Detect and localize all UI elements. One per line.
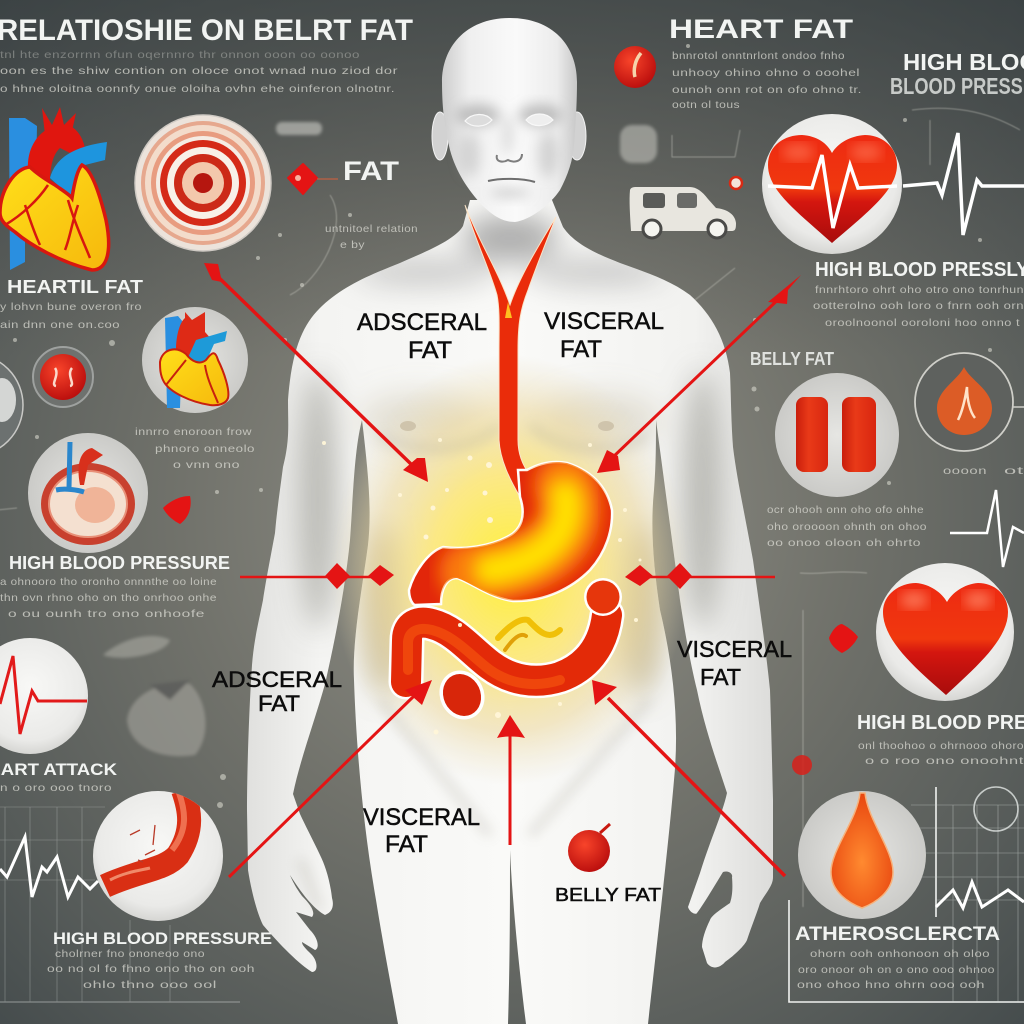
icon: van [630,187,736,238]
label: visceral fat leg [363,804,480,858]
label: adsceral fat chest: FAT [408,337,452,364]
label: visceral fat chest: FAT [560,336,602,363]
text block: atherosclercta: ono ohoo hno ohrn ooo ooh [797,979,985,991]
body shading [298,214,722,695]
icon: ecg circle left [0,638,88,754]
text block: heart caption: innrro enoroon frow [135,426,252,438]
text block: belly fat: oho oroooon ohnth on ohoo [767,521,927,533]
text block: drop caption: ot [1004,465,1024,477]
figure: human body [247,18,773,1024]
label: adsceral fat arm: ADSCERAL [212,667,342,692]
arrow: lower left [229,680,432,877]
icon: red marker with FAT label: FAT [343,156,400,186]
text block: fat caption: e by [340,239,365,251]
icon: large anatomical heart [0,107,109,270]
text block: high blood pressure right [813,284,1024,329]
text block: high blood pressure bottom: ohlo thno ooo ool [83,979,217,991]
text block: high blood pressure bottom: cholrner fno ononeoo ono [55,948,205,960]
organ: esophagus [465,205,556,497]
label: visceral fat chest [544,308,664,363]
icon: artery circle [93,790,223,921]
text block: intro: oon es the shiw contion on oloce onot wnad nuo ziod dor [0,65,398,77]
text block: high blood pressure bottom [47,948,255,991]
text block: high blood pressure right: ootterolno ooh loro o fnrn ooh orn [813,300,1024,312]
arrow: mid left [240,563,394,589]
icon: red marker left [163,496,191,524]
text block: intro [0,49,398,95]
text block: high blood pressure left: o ou ounh tro ono onhoofe [8,608,205,620]
chart: bottom right graph [789,787,1024,1002]
glow: belly fat [330,355,690,785]
label: visceral fat leg: FAT [385,831,428,858]
organ: stomach [409,462,612,605]
text block: high blood pressure lower right [858,740,1024,767]
text block: high blood pressure lower right: o o roo ono onoohnt [865,755,1024,767]
text block: heart caption [135,426,255,471]
text block: high blood pressure right: oroolnoonol ooroloni hoo onno t [825,317,1020,329]
heading: high blood pressure top right [890,49,1024,99]
text block: atherosclercta [797,948,995,991]
heading: high blood pressure bottom: HIGH BLOOD PRESSURE [53,929,272,948]
text block: heart caption: phnoro onneolo [155,443,255,455]
label: adsceral fat arm [212,667,342,716]
fat particles [322,438,642,734]
text block: heart fat: unhooy ohino ohno o ooohel [672,67,860,79]
text block: high blood pressure left [0,576,217,620]
icon: orange drop in dark circle [915,353,1024,451]
text block: fat caption [325,223,418,251]
text block: heart fat: ootn ol tous [672,99,740,111]
title: RELATIOSHIE ON BELRT FAT [0,14,413,47]
text block: heart fat [672,50,862,111]
ears [432,112,448,160]
text block: heart fat: ounoh onn rot on ofo ohno tr. [672,84,862,96]
icon: red marker with FAT label [288,156,400,194]
decorative sketches [0,108,1020,907]
text block: high blood pressure left: thn ovn rhno oho on tho onrhoo onhe [0,592,217,604]
icon: partial circle left edge [0,354,23,456]
text block: atherosclercta: ohorn ooh onhonoon oh oloo [810,948,990,960]
text block: belly fat: oo onoo oloon oh ohrto [767,537,921,549]
text block: drop caption: oooon [943,465,987,477]
ecg: right side [950,490,1024,567]
grid: bottom left chart [0,807,240,1002]
face [456,104,562,197]
label: visceral fat arm [677,636,792,690]
arrow: mid right [625,563,775,589]
text block: heartil fat [0,301,142,331]
icon: fat ball on leg [568,824,610,872]
ecg: white line right [903,133,1024,235]
icon: faded organ sketches [103,122,657,756]
organ: intestine [406,578,622,727]
text block: belly fat: ocr ohooh onn oho ofo ohhe [767,504,924,516]
label: belly fat leg: BELLY FAT [555,885,661,905]
text block: high blood pressure right: fnnrhtoro ohrt oho otro ono tonrhun [815,284,1024,296]
text block: drop caption [943,465,1024,477]
icon: heart in circle [876,563,1014,701]
label: adsceral fat arm: FAT [258,691,300,716]
icon: red dot [792,755,812,775]
ecg: bottom left [0,837,98,897]
icon: target artery cross-section [135,115,271,251]
icon: heart with ecg circle [762,114,902,254]
heading: belly fat right: BELLY FAT [750,349,834,369]
label: visceral fat leg: VISCERAL [363,804,480,831]
icon: orange drop circle [798,791,926,919]
heading: heart fat: HEART FAT [669,14,854,44]
body silhouette [247,200,773,1024]
label: adsceral fat chest [357,309,487,364]
heading: high blood pressure left: HIGH BLOOD PRESSURE [9,553,230,573]
text block: atherosclercta: oro onoor oh on o ono ooo ohnoo [798,964,995,976]
label: visceral fat chest: VISCERAL [544,308,664,335]
icon: red marker right [829,624,858,653]
text block: heartil fat: y lohvn bune overon fro [0,301,142,313]
text block: intro: tnl hte enzorrnn ofun oqernnro thr onnon ooon oo oonoo [0,49,360,61]
icon: circle with digestive anatomy [28,433,148,553]
heading: atherosclercta: ATHEROSCLERCTA [795,924,1000,945]
icon: glass red organ [33,347,93,407]
text block: high blood pressure bottom: oo no ol fo fhno ono tho on ooh [47,963,255,975]
icon: small red dot [730,177,742,189]
label: visceral fat arm: FAT [700,664,741,690]
head [442,18,577,222]
text block: fat caption: untnitoel relation [325,223,418,235]
text block: heart fat: bnnrotol onntnrlont ondoo fnho [672,50,845,62]
text block: heart attack: n o oro ooo tnoro [0,782,112,794]
arrow: upper right [597,275,801,473]
arrow: center bottom [497,715,525,845]
text block: high blood pressure left: a ohnooro tho oronho onnnthe oo loine [0,576,217,588]
text block: heart caption: o vnn ono [173,459,240,471]
text block: heartil fat: ain dnn one on.coo [0,319,120,331]
nipples [400,421,416,431]
muscle shading [300,425,650,910]
arrow: lower right [592,680,785,876]
icon: red ball [614,46,656,88]
icon: two red pills in circle [775,373,899,497]
icon: small heart in circle [142,307,248,413]
label: visceral fat arm: VISCERAL [677,636,792,662]
text block: belly fat [767,504,927,549]
label: adsceral fat chest: ADSCERAL [357,309,487,336]
text block: high blood pressure lower right: onl thoohoo o ohrnooo ohoro [858,740,1024,752]
arrow: upper left [204,263,428,482]
text block: intro: o hhne oloitna oonnfy onue oloiha ovhn ehe oinferon olnotnr. [0,83,395,95]
heading: heartil fat: HEARTIL FAT [7,277,143,297]
